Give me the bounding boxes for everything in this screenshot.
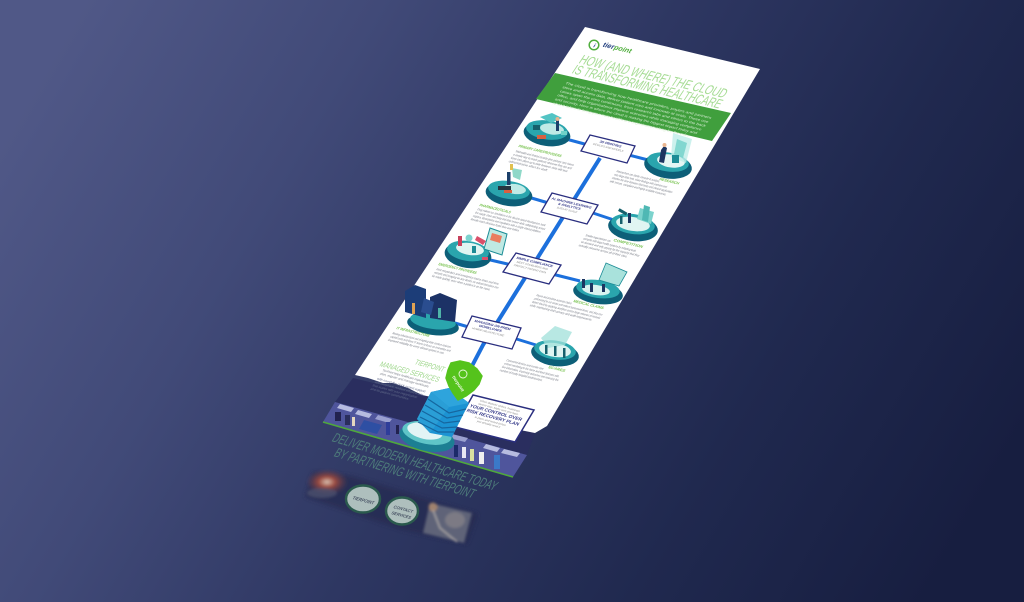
intro text: store and access data, deliver patient care and innovate at scale. These use: [561, 85, 710, 124]
heading and text: upper left: PHARMACEUTICALS: [478, 203, 513, 214]
heading and text: upper left: regions, laboratories and regulators with a single shared platform.: [472, 214, 542, 234]
icon: green shield badge: [446, 361, 482, 400]
closing photo: doctor: [306, 469, 348, 498]
intro text: [551, 81, 713, 137]
box: node one: 3D PRINTING: [599, 140, 623, 148]
heading and text: top right: very large data sets, share findings with partners and: [613, 173, 668, 189]
heading and text: upper left: the supply chain and keep trial data secure while collaborating across: [474, 211, 547, 231]
heading and text: middle right: detect fraud by applying analytics across large volumes of records: [531, 300, 602, 320]
callout box: disaster recovery: [455, 395, 534, 442]
node: lower right illustration: [530, 326, 580, 369]
box: node three: MEET STANDARDS AND: [516, 260, 549, 271]
panel: green intro band: [536, 73, 731, 141]
heading and text: top left: [508, 144, 575, 177]
box: node four: MANAGING ON-PREM: [474, 319, 512, 331]
box: node two: DATA AT SCALE: [556, 206, 578, 214]
heading and text: top left: PRIMARY CARE/PROVIDERS: [517, 144, 563, 158]
heading and text: upper right: compete with large health systems by adopting tools: [582, 237, 637, 253]
heading and text: middle right: [529, 293, 606, 323]
infographic sheet: [305, 27, 760, 544]
heading and text: top right: Researchers use elastic compute to analyse: [615, 169, 661, 183]
callout box: disaster recovery: YOUR CONTROL OVER: [468, 404, 524, 423]
text block: managed services: plan, migrate and manage workloads: [379, 372, 430, 388]
intro text: office, and help organisations improve outcomes while managing compliance: [556, 93, 703, 131]
heading and text: upper right: on demand and only paying for the capacity that they: [580, 240, 641, 258]
heading and text: middle right: while maintaining strict privacy and audit requirements.: [529, 304, 593, 322]
callout box: disaster recovery: RISK RECOVERY PLAN: [465, 408, 521, 427]
box: node one: DEVICES AND MODELS: [592, 142, 625, 153]
node: lower left illustration: [405, 285, 460, 339]
building base: [397, 417, 457, 457]
box: node four: WORKLOADS: [478, 324, 503, 333]
box: node three: [503, 253, 561, 284]
heading and text: middle left: be made quickly, even when a patient is on the move.: [431, 274, 492, 292]
timeline connectors: [448, 139, 652, 345]
heading and text: lower right: number of costly hospital readmissions.: [499, 369, 544, 382]
heading and text: lower left: IT INFRASTRUCTURE: [395, 326, 432, 338]
panel: white page: [355, 27, 760, 433]
heading and text: top left: a simple way to reach patients wherever they are and: [512, 153, 573, 170]
heading and text: upper right: actually consume across all of their sites.: [578, 244, 629, 259]
heading and text: top right: RESEARCH: [658, 177, 681, 186]
button: contact: CONTACT: [392, 505, 414, 514]
heading and text: lower left: [387, 326, 454, 356]
heading and text: middle right: MEDICAL CLAIMS: [572, 299, 606, 310]
heading and text: top left: Telehealth and shared records give primary care teams: [514, 149, 575, 167]
callout box: disaster recovery: When disaster strikes, healthcare: [479, 399, 522, 413]
button: about: [346, 486, 380, 512]
heading: managed services: TIERPOINT: [413, 358, 447, 374]
icon: cloud building: [417, 388, 469, 437]
closing photo: stethoscope: [423, 502, 472, 543]
box: node two: AI, MACHINE LEARNING: [551, 197, 593, 210]
heading and text: lower left: capital costs and frees IT teams to focus on innovation and: [389, 335, 452, 353]
node: upper left illustration: [484, 164, 534, 209]
node: top right illustration: [642, 133, 694, 182]
timeline spine: [472, 158, 600, 366]
callout box: disaster recovery: in place and tested before: [474, 415, 508, 427]
heading and text: upper right: [578, 233, 645, 261]
box: node three: SIMPLE COMPLIANCE: [515, 256, 554, 268]
button: about: TIERPOINT: [351, 496, 375, 506]
heading and text: top right: [609, 169, 681, 197]
callout box: disaster recovery: you actually need it: [476, 419, 501, 429]
text block: managed services: and compliant, resilient infrastructure: [374, 380, 424, 397]
intro text: The cloud is transforming how healthcare providers, payers and partners: [564, 81, 713, 120]
title: [569, 53, 730, 112]
heading and text: lower right: extend monitoring to the home and feed clinicians with: [503, 362, 560, 378]
heading and text: lower right: Connected devices and remote care: [505, 358, 545, 371]
logo: tierpoint: [601, 41, 635, 55]
heading and text: top left: administrative effort for staff.: [508, 160, 549, 172]
box: node two: & ANALYTICS: [557, 202, 582, 211]
title: IS TRANSFORMING HEALTHCARE: [569, 63, 726, 112]
heading and text: middle left: EMERGENCY PROVIDERS: [437, 262, 478, 275]
button: contact: [386, 498, 418, 524]
heading and text: middle left: records and imaging on any device so critical decisions can: [433, 271, 500, 290]
heading and text: top right: with secure, compliant and highly scalable resources.: [609, 180, 667, 196]
logo: i: [592, 44, 597, 49]
text block: managed services: with round the clock expert support: [376, 377, 427, 393]
box: node one: [581, 135, 635, 163]
node: upper right illustration: [606, 205, 660, 244]
box: node four: [462, 316, 521, 349]
callout box: disaster recovery: cannot stop. Make sure you have: [477, 402, 520, 416]
heading: managed services: MANAGED SERVICES: [378, 360, 442, 384]
panel: dark lower section: [335, 378, 535, 455]
intro text: cases span the care continuum, from research labs and clinics to the back: [559, 89, 707, 128]
heading: managed services: [378, 358, 447, 384]
node: top left illustration: [522, 113, 572, 149]
heading and text: middle left: [431, 262, 502, 293]
node: middle left illustration: [443, 228, 507, 271]
button: contact: SERVICES: [390, 511, 412, 520]
heading and text: lower left: improved reliability for every clinical system in use.: [387, 338, 446, 355]
heading and text: lower right: ECARES: [547, 365, 567, 373]
heading and text: upper left: [470, 203, 549, 238]
heading and text: upper right: Smaller organisations can: [584, 233, 612, 243]
closing heading: BY PARTNERING WITH TIERPOINT: [331, 445, 480, 501]
heading and text: lower left: Moving infrastructure out of ageing data centers reduces: [391, 331, 452, 349]
heading and text: upper right: COMPETITION: [612, 238, 644, 249]
icon: green shield badge: tierpoint: [451, 375, 466, 393]
heading and text: middle right: Payers and providers automate claims: [535, 293, 573, 305]
intro text: and security. Here is where the cloud is making the biggest impact today and: [554, 97, 698, 135]
box: node two: [541, 193, 598, 224]
scene strip: data center staff: [323, 402, 527, 477]
node: middle right illustration: [572, 263, 627, 307]
heading and text: top right: shorten the time between discovery and clinical application: [611, 176, 674, 194]
heading and text: lower right: [499, 358, 567, 385]
text block: managed services: TierPoint helps healthcare organisations: [381, 368, 432, 385]
heading and text: upper left: Results reach clinicians faster than ever before.: [470, 218, 521, 233]
closing heading: [329, 430, 502, 501]
box: node three: PROTECT PATIENT DATA: [513, 263, 547, 274]
heading and text: upper left: Drug makers run simulations in the cloud to speed development, track: [476, 207, 547, 227]
heading and text: lower right: live information, improving outcomes and reducing the: [501, 365, 560, 382]
heading and text: middle left: First responders and emergency rooms share real-time: [435, 267, 500, 286]
intro text: what it takes to bring your own healthcare organisation along for the ride.: [551, 101, 690, 137]
title: HOW (AND WHERE) THE CLOUD: [576, 53, 730, 101]
text block: managed services: that scales with your organisation: [372, 384, 418, 399]
box: node four: HYBRID ARCHITECTURE: [471, 326, 505, 337]
closing band: [305, 472, 478, 544]
strip baseline: [323, 422, 513, 477]
closing heading: DELIVER MODERN HEALTHCARE TODAY: [329, 430, 502, 493]
text block: managed services: and its patient communities.: [370, 387, 410, 401]
text block: managed services: [370, 368, 432, 404]
heading and text: middle right: processing to cut errors and reduce turnaround times, and they can: [533, 297, 604, 317]
heading and text: top left: keep care plans up to date between visits with less: [510, 156, 569, 173]
